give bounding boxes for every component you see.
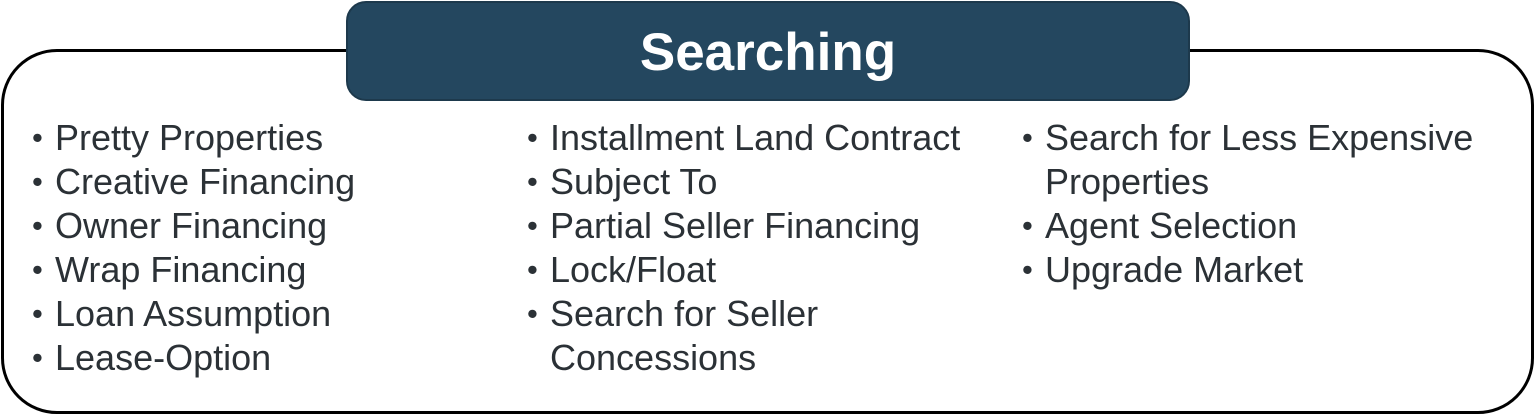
text block: column 3: Properties: [1045, 161, 1209, 202]
text block: column 2: Partial Seller Financing: [550, 205, 920, 246]
text block: column 1: Creative Financing: [55, 161, 355, 202]
text block: column 3: Agent Selection: [1045, 205, 1297, 246]
text block: column 2: Subject To: [550, 161, 717, 202]
text block: column 1: [33, 117, 355, 378]
text block: column 1: Pretty Properties: [55, 117, 323, 158]
text block: column 2: Concessions: [550, 337, 756, 378]
text block: column 1: Lease-Option: [55, 337, 271, 378]
text block: column 2: Search for Seller: [550, 293, 818, 334]
text block: column 2: Installment Land Contract: [550, 117, 960, 158]
title: [346, 1, 1190, 101]
text block: column 3: Upgrade Market: [1045, 249, 1303, 290]
text block: column 1: Wrap Financing: [55, 249, 306, 290]
text block: column 1: Loan Assumption: [55, 293, 331, 334]
title: Searching: [640, 23, 896, 82]
text block: column 2: Lock/Float: [550, 249, 716, 290]
text block: column 1: Owner Financing: [55, 205, 327, 246]
text block: column 3: [1023, 117, 1473, 290]
text block: column 2: [528, 117, 960, 378]
text block: column 3: Search for Less Expensive: [1045, 117, 1473, 158]
